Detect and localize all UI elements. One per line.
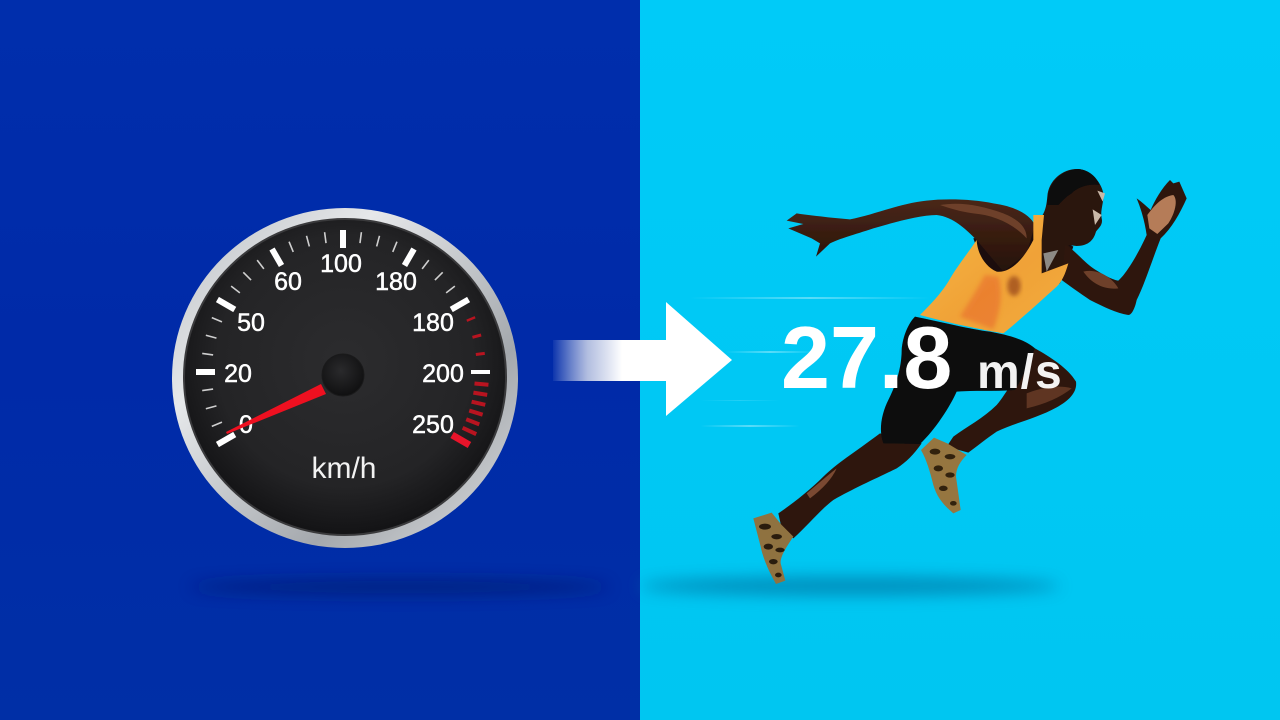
armhole white trim [1043,250,1058,272]
gauge number labels: 100 [320,250,362,278]
panel: right cyan background [640,0,1280,720]
speed unit m/s: m/s [977,346,1063,399]
gauge number labels: 50 [237,309,265,337]
hair [1047,169,1099,205]
back arm [787,199,1035,272]
gauge number labels [224,250,464,439]
gauge minor ticks [202,232,455,426]
front arm highlight [1083,271,1118,289]
torso skin [973,223,1073,293]
gauge red needle [226,384,326,434]
black shorts [881,317,1035,444]
gauge number labels: 180 [375,268,417,296]
runner ground shadow [640,577,1060,595]
speed value 27.8: 27.8 [781,308,952,407]
conversion arrow [553,302,732,416]
raised shoe pattern [930,449,957,506]
gauge ground shadow [190,580,610,594]
forward knee highlight [1027,387,1072,408]
rear shoe pattern [759,524,785,577]
rear leg highlight [807,468,837,498]
rear leg [778,433,922,538]
gauge number labels: 180 [412,309,454,337]
gauge number labels: 250 [412,411,454,439]
gauge unit label: km/h [311,452,377,485]
head and neck [1042,169,1103,273]
raised shoe [921,438,967,513]
gauge number labels: 200 [422,360,464,388]
forward leg [947,348,1076,453]
orange vest [920,215,1068,333]
gauge number labels: 20 [224,360,252,388]
panel: left blue background [0,0,640,720]
rear shoe [753,513,793,584]
vest orange folds [960,275,1001,329]
face highlight [1093,191,1105,225]
gauge number labels: 0 [239,411,253,439]
gauge major ticks [196,230,490,444]
arrow shaft [553,340,668,381]
back arm highlight [940,204,1027,238]
gauge chrome rim [172,208,518,548]
gauge dial face [184,219,506,535]
vest dark patch [1007,276,1021,296]
runner illustration [753,169,1187,584]
speedometer gauge [172,208,518,548]
gauge centre hub [322,354,364,396]
gauge red zone ticks [452,317,488,445]
palm highlight [1147,195,1176,234]
arrow head [666,302,732,416]
speed lines [690,297,930,427]
gauge number labels: 60 [274,268,302,296]
front arm [1062,180,1187,315]
